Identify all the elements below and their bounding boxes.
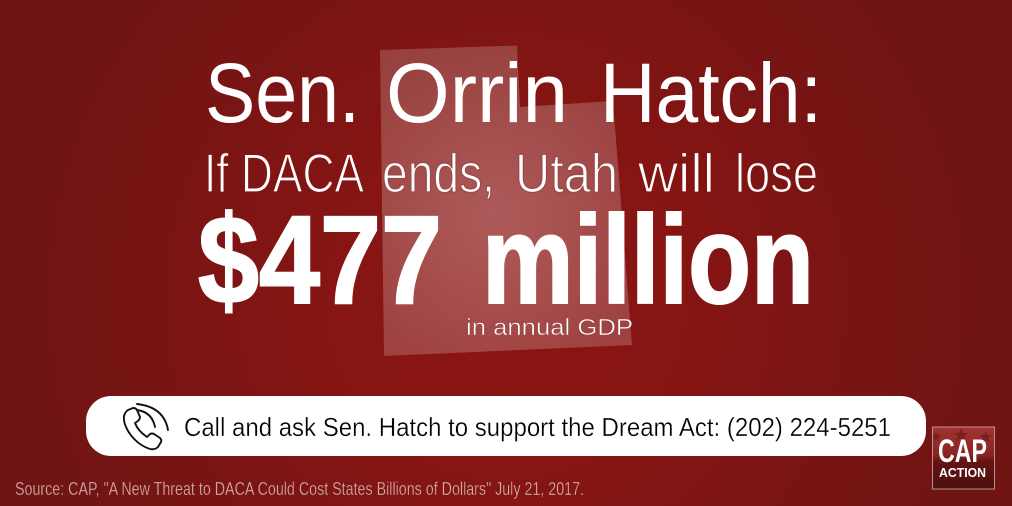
call to action text: Call and ask Sen. Hatch to support the Dream Act: (202) 224-5251 — [184, 412, 891, 442]
CAP Action logo — [932, 427, 994, 489]
figure caption: in annual GDP — [466, 314, 633, 340]
headline figure: $477 — [198, 191, 442, 330]
map of Utah — [380, 46, 632, 356]
title: Hatch: — [600, 46, 822, 140]
CAP Action logo: CAP — [938, 433, 987, 469]
headline figure — [198, 191, 814, 330]
source note: Source: CAP, "A New Threat to DACA Could Cost States Billions of Dollars" July 21, 2017. — [15, 479, 584, 499]
subtitle: ends, — [382, 142, 495, 204]
icon: telephone — [124, 404, 168, 449]
subtitle: will — [637, 142, 715, 204]
title — [205, 46, 822, 140]
subtitle: Utah — [515, 142, 618, 204]
CAP Action logo: ACTION — [939, 466, 986, 480]
title: Orrin — [386, 46, 568, 140]
title: Sen. — [205, 46, 360, 140]
subtitle: lose — [735, 142, 818, 204]
call to action pill — [86, 396, 926, 456]
subtitle: If DACA — [204, 142, 364, 204]
subtitle — [204, 142, 818, 204]
headline figure: million — [482, 191, 814, 330]
stars — [933, 428, 992, 443]
